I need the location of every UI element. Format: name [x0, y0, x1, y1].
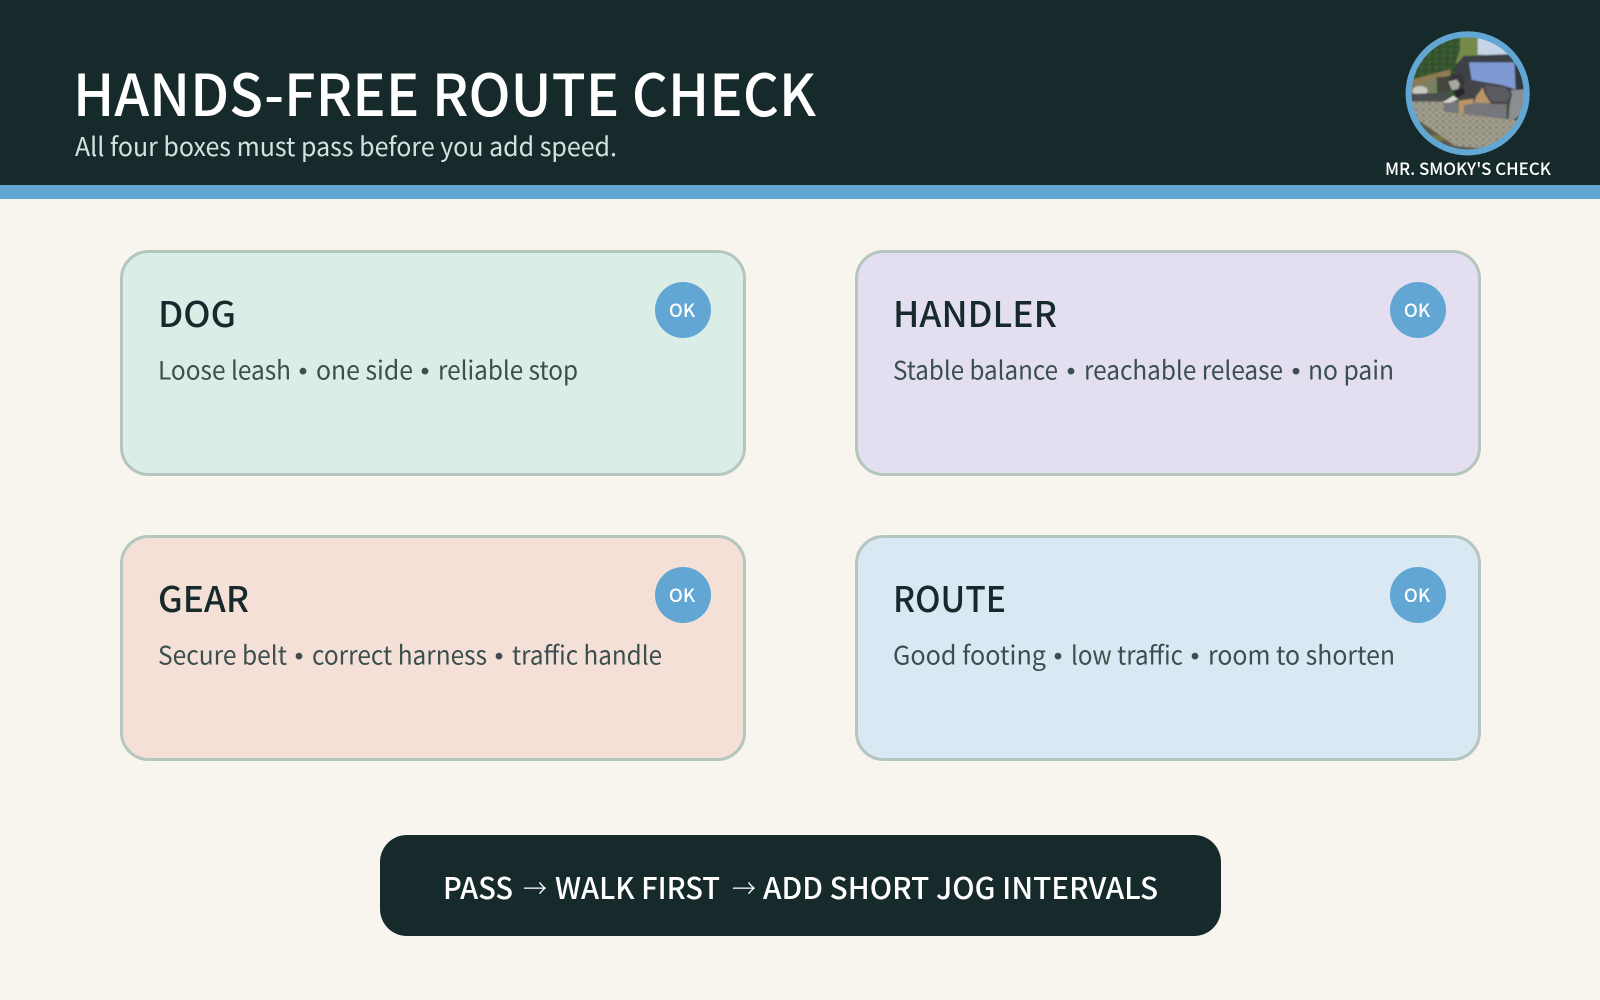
dog criteria: • [299, 358, 307, 386]
handler criteria: reachable release [1084, 350, 1283, 388]
handler criteria: no pain [1308, 350, 1394, 388]
route criteria: Good footing [893, 636, 1047, 672]
banner text: → [732, 869, 756, 906]
route OK badge: OK [1404, 582, 1431, 608]
route criteria: • [1054, 642, 1062, 670]
avatar: Mr. Smoky photo [1405, 30, 1532, 157]
panel: handler [856, 252, 1480, 474]
handler OK badge: OK [1404, 297, 1431, 323]
handler criteria: • [1067, 358, 1075, 386]
gear criteria: correct harness [312, 636, 487, 672]
route criteria: room to shorten [1208, 636, 1395, 672]
gear OK badge: OK [669, 582, 696, 608]
handler criteria: Stable balance [893, 350, 1058, 388]
route criteria [893, 636, 1395, 672]
dog criteria: • [421, 358, 429, 386]
handler heading: HANDLER [893, 287, 1057, 338]
dog OK badge: OK [669, 297, 696, 323]
route criteria: • [1191, 642, 1199, 670]
panel: dog [122, 252, 744, 474]
dog criteria [158, 350, 578, 388]
call to action banner [380, 835, 1221, 936]
gear OK badge [655, 567, 711, 623]
banner text: → [523, 869, 547, 906]
route heading: ROUTE [893, 572, 1006, 623]
gear criteria: traffic handle [512, 636, 662, 672]
dog criteria: reliable stop [438, 350, 578, 388]
dog criteria: one side [316, 350, 413, 388]
gear criteria [158, 636, 662, 672]
gear criteria: Secure belt [158, 636, 287, 672]
gear heading: GEAR [158, 572, 249, 623]
route OK badge [1390, 567, 1446, 623]
dog heading: DOG [158, 287, 236, 338]
route criteria: low traffic [1071, 636, 1183, 672]
dog criteria: Loose leash [158, 350, 291, 388]
panel: route [856, 536, 1480, 760]
banner text [443, 864, 1158, 908]
gear criteria: • [495, 642, 503, 670]
header band [0, 0, 1600, 199]
gear criteria: • [295, 642, 303, 670]
subtitle: All four boxes must pass before you add speed. [75, 127, 617, 164]
title: HANDS-FREE ROUTE CHECK [73, 49, 816, 133]
banner text: WALK FIRST [555, 864, 720, 908]
dog OK badge [655, 282, 711, 338]
handler OK badge [1390, 282, 1446, 338]
dog [1455, 79, 1512, 104]
handler criteria: • [1292, 358, 1300, 386]
avatar caption: MR. SMOKY'S CHECK [1385, 155, 1552, 180]
banner text: PASS [443, 864, 513, 908]
handler criteria [893, 350, 1394, 388]
panel: gear [122, 536, 744, 760]
banner text: ADD SHORT JOG INTERVALS [763, 864, 1158, 908]
